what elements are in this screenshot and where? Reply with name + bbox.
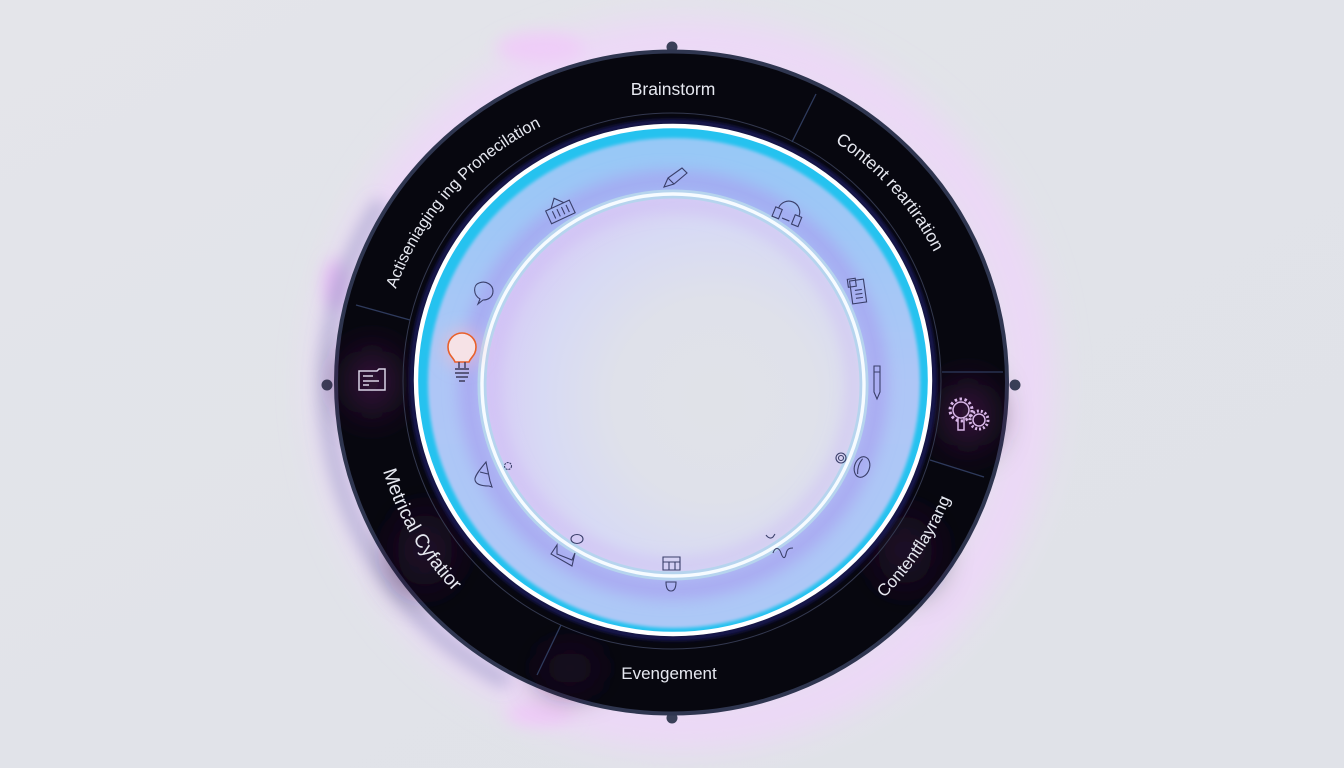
label: Brainstorm: Brainstorm (631, 79, 715, 99)
icon: glowing light bulb (442, 328, 482, 381)
connector nubs (322, 42, 1020, 724)
label: Contentflayrang: Contentflayrang (878, 496, 952, 596)
icon: swirl (773, 548, 793, 558)
icon: small gear (504, 462, 512, 470)
icon: oval coin (852, 455, 872, 479)
icon: building (542, 193, 575, 224)
icon: fingerprint (836, 453, 846, 463)
icon: gears (950, 399, 988, 430)
ring purple highlights (348, 350, 992, 686)
panel: inner light disc with cyan crescent ring (412, 122, 934, 638)
ring segment dividers (356, 94, 1003, 675)
icon set along the ring (475, 168, 880, 591)
icon: headphones (772, 197, 806, 227)
panel: dark outer ring (336, 52, 1007, 714)
icon: pencil (664, 168, 687, 187)
icon: table (663, 557, 680, 570)
icon: cup (666, 582, 676, 591)
label: Evengement: Evengement (621, 664, 717, 683)
label: Content reartiration: Content reartiration (838, 134, 941, 252)
icon: pen (874, 366, 880, 399)
icon: small badge (571, 534, 583, 544)
label: Actiseniaging ing Pronecilation: Actiseniaging ing Pronecilation (387, 120, 540, 289)
icon: folder panel (359, 369, 385, 390)
icon: cone (475, 462, 492, 487)
icon: small tick (766, 534, 775, 538)
label: Metrical Cyfatior: Metrical Cyfatior (383, 468, 461, 590)
icon: open notebook (551, 545, 575, 566)
icon: speech bubble (475, 282, 493, 304)
icon: document (847, 277, 867, 304)
outer pink glow (324, 32, 1030, 726)
panel: central circle (481, 193, 865, 577)
